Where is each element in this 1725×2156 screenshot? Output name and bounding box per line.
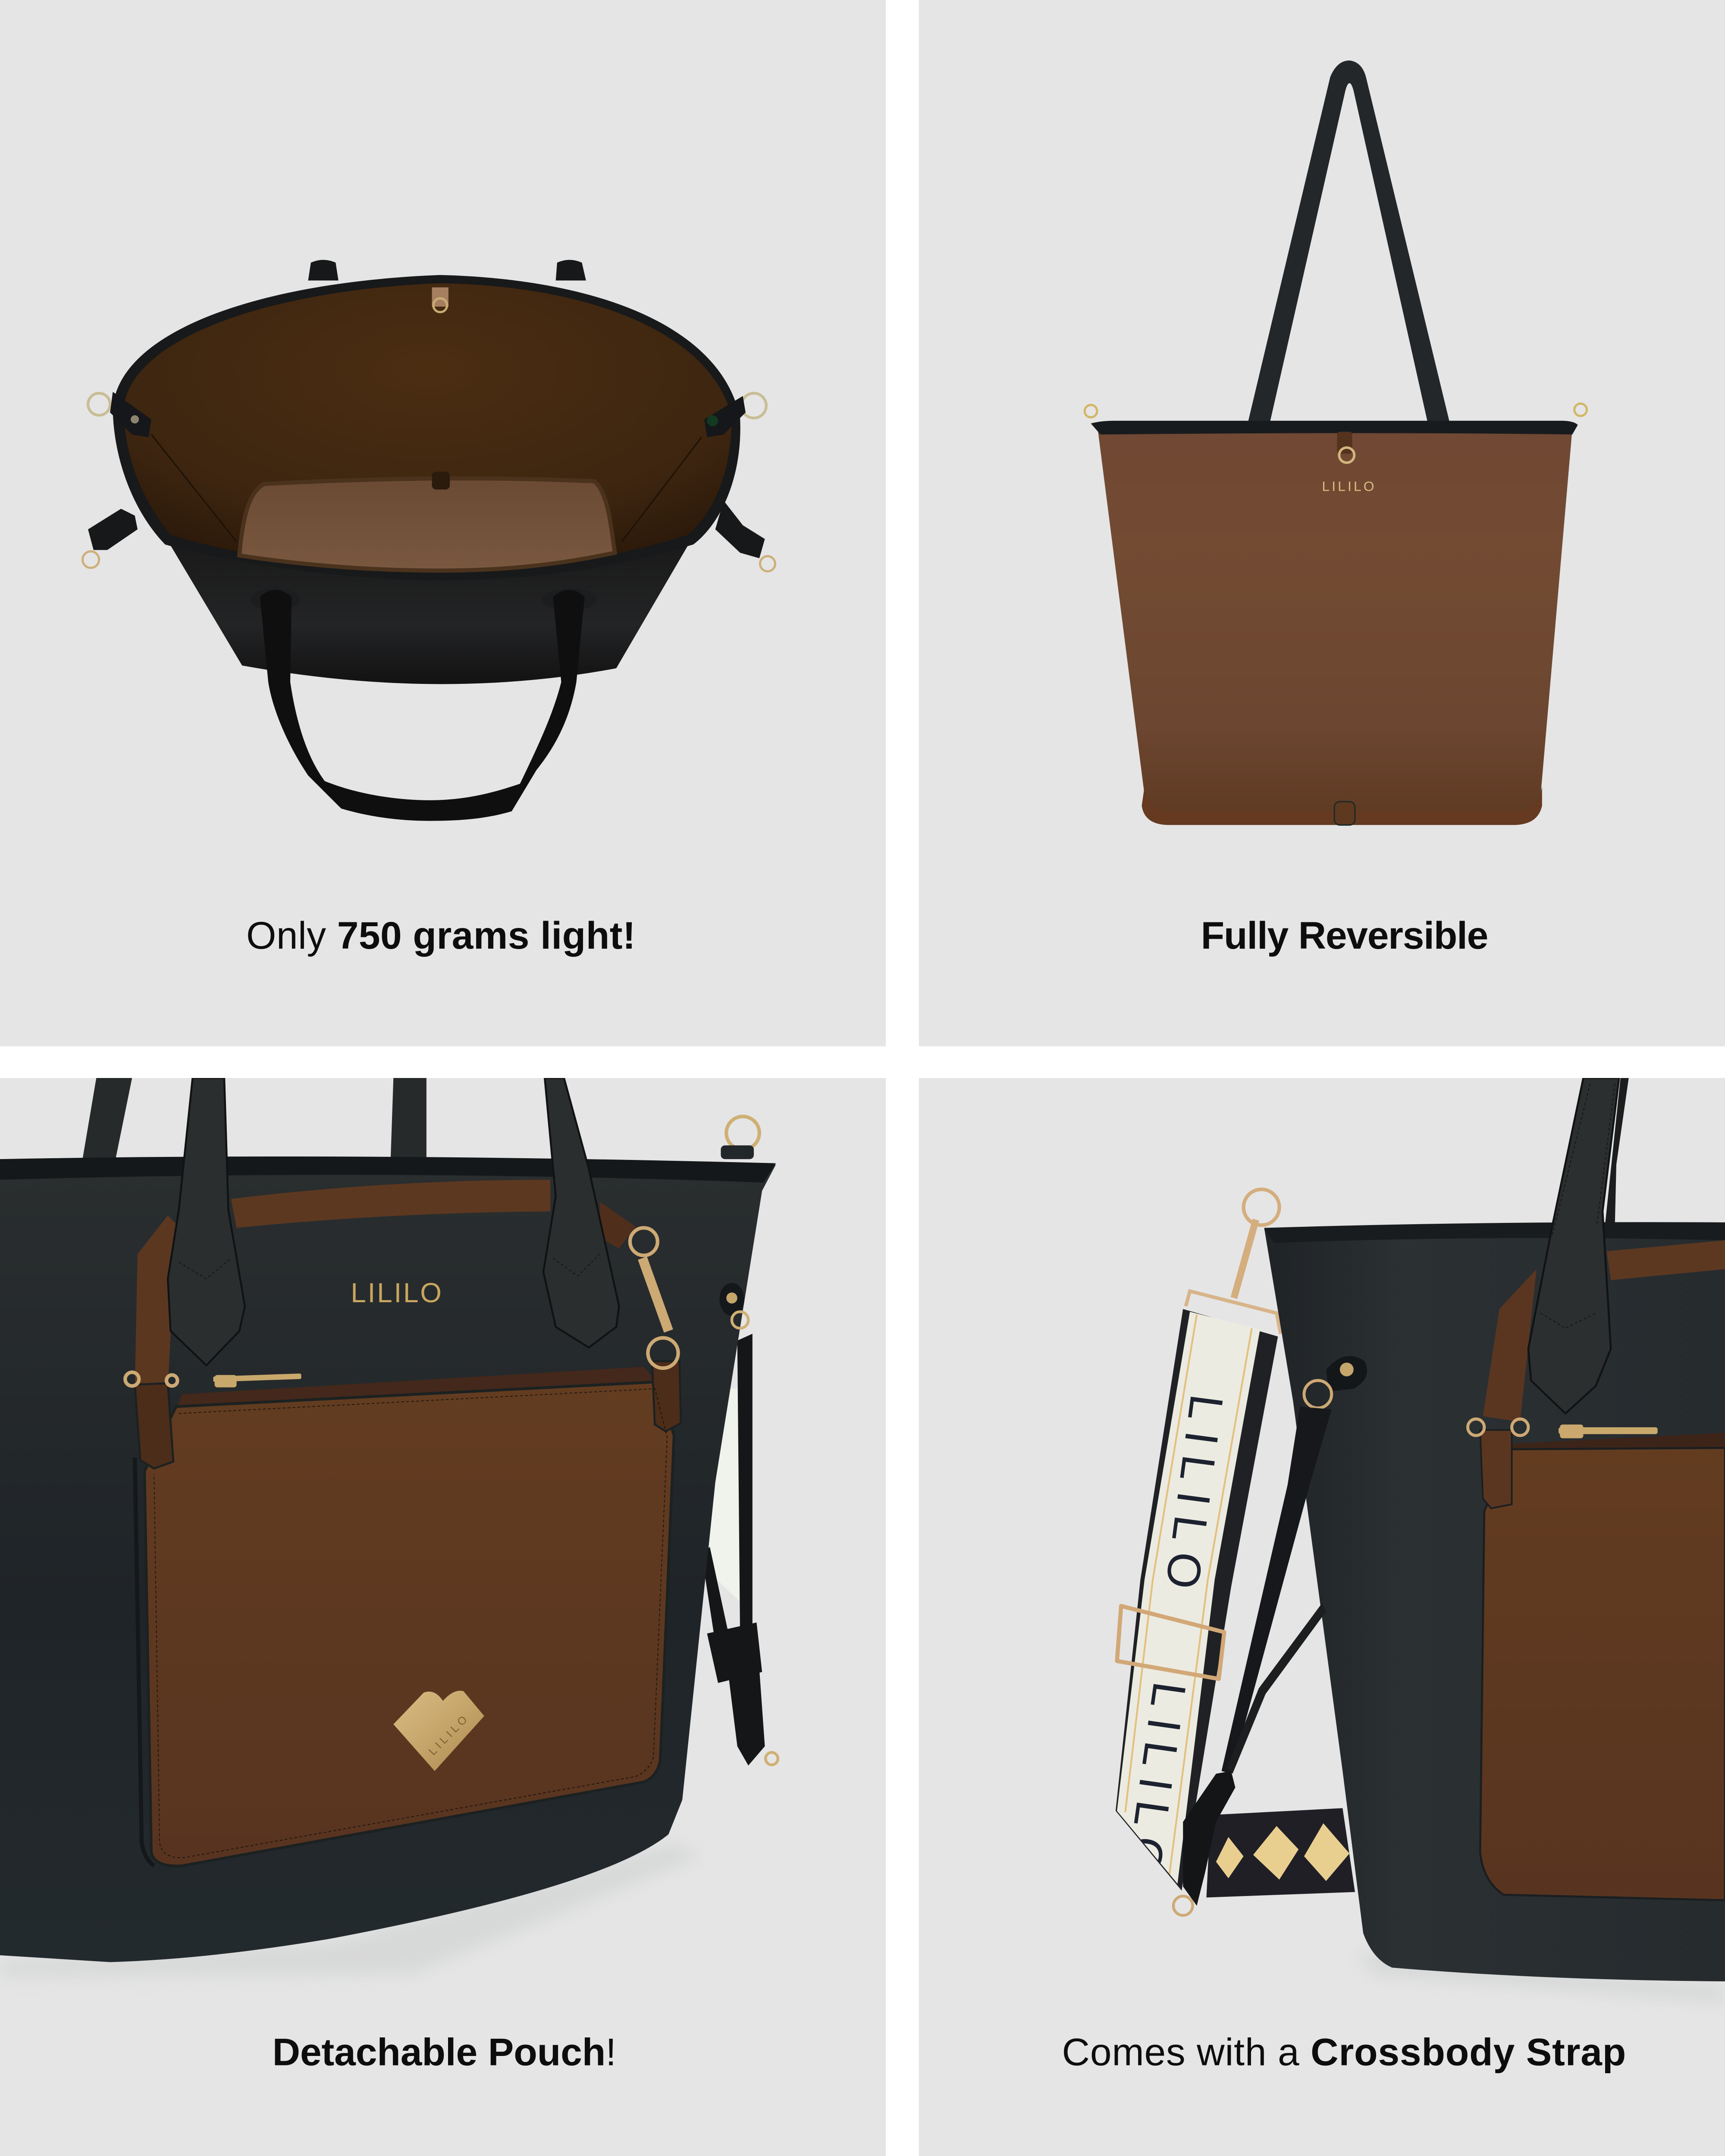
rings and zip pull <box>1468 1419 1658 1438</box>
strap text <box>1117 1391 1233 1877</box>
side eyelets <box>110 392 746 437</box>
side rings <box>1085 404 1587 417</box>
side stud <box>719 1283 748 1328</box>
panel: fully reversible <box>919 0 1725 1047</box>
bag body <box>1264 1222 1725 1981</box>
bag body <box>0 1159 776 1962</box>
strap text: LILILO <box>1156 1391 1233 1592</box>
pouch right strap <box>600 1202 636 1248</box>
bag body exterior <box>165 536 693 684</box>
zip pull <box>213 1373 301 1387</box>
base fold <box>1142 787 1542 825</box>
bag rim <box>0 1156 776 1182</box>
side stud and strap <box>1173 1356 1367 1915</box>
back handles <box>82 1078 427 1159</box>
logo: LILILO <box>1322 478 1374 494</box>
woven strap <box>1116 1309 1278 1891</box>
lining seams <box>151 435 702 542</box>
top tab and ring <box>432 287 450 489</box>
reversible bag body <box>1098 429 1572 822</box>
strap slider buckle <box>1117 1606 1224 1679</box>
bag inner base panel <box>239 478 615 570</box>
panel: 750 grams light <box>0 0 886 1047</box>
side ring <box>721 1116 759 1159</box>
shoulder strap back <box>1605 1078 1629 1222</box>
logo: LILILO <box>351 1277 442 1308</box>
back handle stubs <box>308 260 586 281</box>
shoulder handle <box>1248 60 1450 423</box>
rings and clasp <box>125 1228 678 1386</box>
pouch panel <box>144 1382 674 1866</box>
panel: crossbody strap <box>919 1078 1725 2156</box>
panel: detachable pouch <box>0 1078 886 2156</box>
handle stitches <box>179 1254 600 1279</box>
pouch left tab <box>135 1383 173 1469</box>
pouch tab <box>1480 1430 1512 1508</box>
pouch panel <box>1480 1448 1725 1900</box>
pouch left edge <box>135 1457 154 1866</box>
front handle <box>1528 1078 1619 1413</box>
brown trim <box>1607 1240 1725 1280</box>
bag rim <box>1264 1222 1725 1243</box>
pouch stitching <box>154 1389 667 1858</box>
pouch zipper <box>1512 1433 1725 1452</box>
floor shadow <box>1355 1952 1725 2002</box>
floor shadow <box>0 1843 702 1977</box>
top D buckle <box>1186 1291 1281 1334</box>
pouch back trim <box>231 1180 550 1228</box>
side straps and rings <box>82 393 775 571</box>
strap end ring <box>765 1752 778 1765</box>
webbing strap <box>1206 1808 1355 1898</box>
side strap <box>702 1334 765 1765</box>
front handles <box>251 589 597 821</box>
bag lining <box>124 283 732 570</box>
front handles <box>168 1078 619 1365</box>
caption: Fully Reversible <box>1201 914 1488 957</box>
caption: Detachable Pouch! <box>273 2031 616 2074</box>
rim <box>1091 421 1578 435</box>
strap text: LILILO <box>1117 1679 1196 1877</box>
bag rim <box>113 275 740 546</box>
base tab <box>1334 802 1355 825</box>
hearts on webbing <box>1216 1823 1349 1881</box>
handle stitches <box>1541 1084 1615 1328</box>
caption: Only 750 grams light! <box>246 914 636 957</box>
heart badge: LILILO <box>427 1714 470 1758</box>
zipper <box>176 1367 658 1412</box>
pouch left strap <box>1483 1269 1537 1422</box>
front tab and ring <box>1337 432 1354 463</box>
pouch right tab <box>652 1361 681 1432</box>
heart badge <box>393 1691 484 1771</box>
clasp and ring <box>1234 1189 1280 1298</box>
caption: Comes with a Crossbody Strap <box>1062 2031 1626 2074</box>
pouch left strap <box>135 1216 176 1389</box>
strap reflection <box>704 1389 740 1602</box>
